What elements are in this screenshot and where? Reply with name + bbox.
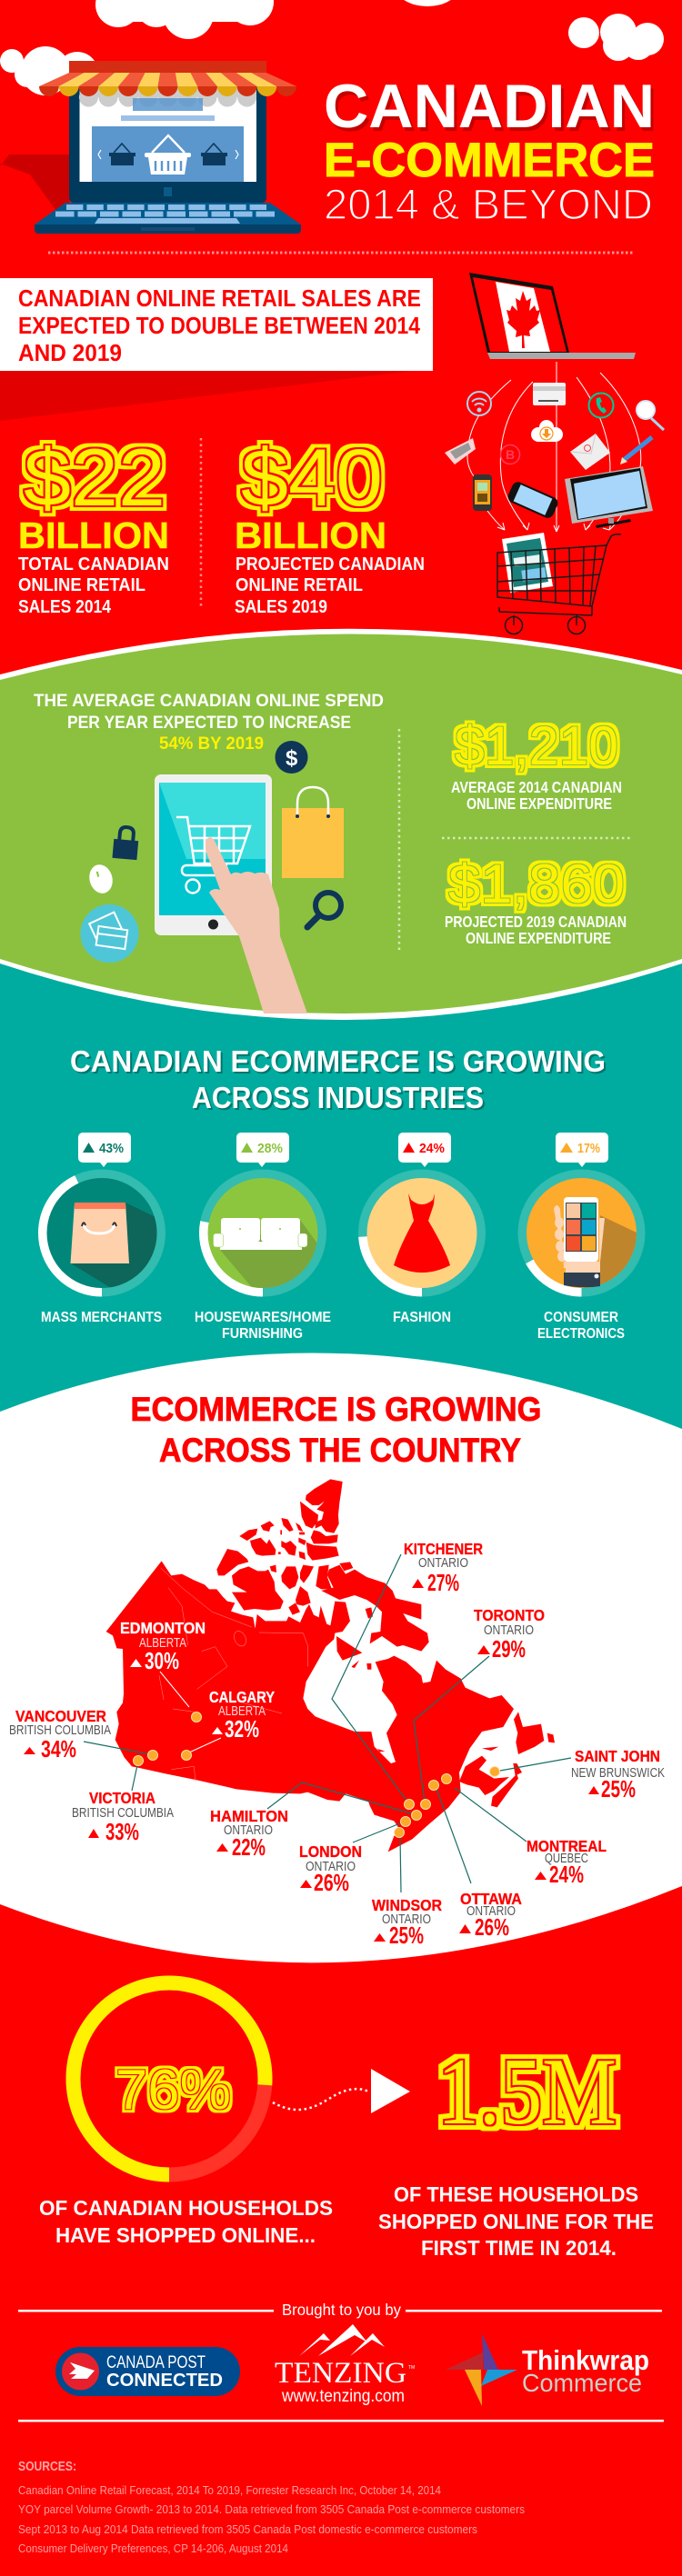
stat: 1.5M: 1.5M [437, 2038, 617, 2144]
label: Vancouver: VANCOUVER [15, 1707, 106, 1725]
stat: $22 billion: SALES 2014 [18, 597, 112, 617]
stat: $1,860: $1,860 [448, 854, 625, 914]
label: Ottawa [459, 1890, 522, 1941]
label: Windsor: 25% [389, 1922, 424, 1949]
icon: pencil [620, 437, 652, 464]
panel: fashion [363, 1133, 481, 1325]
panel: mass merchants: 43% [99, 1141, 124, 1156]
arrow: dotted connector [273, 2069, 410, 2113]
stat: $22 billion: BILLION [18, 514, 169, 556]
label: Ottawa: ONTARIO [466, 1904, 516, 1919]
icon: wifi [467, 392, 491, 415]
panel: housewares [195, 1133, 331, 1342]
logo: Canada Post Connected: CONNECTED [106, 2371, 223, 2391]
panel: housewares: HOUSEWARES/HOME [195, 1310, 331, 1325]
label: Calgary: CALGARY [209, 1688, 275, 1706]
icon: search magnifier [307, 893, 341, 927]
label: Windsor: WINDSOR [372, 1896, 442, 1914]
title: E-COMMERCE [324, 134, 655, 187]
chart: 76% donut [73, 1983, 266, 2174]
heading: across the country: ACROSS THE COUNTRY [159, 1432, 521, 1469]
headline box: AND 2019 [18, 341, 122, 366]
headline box: CANADIAN ONLINE RETAIL SALES ARE [18, 286, 421, 312]
label: Kitchener: 27% [427, 1569, 459, 1596]
map of Canada [106, 1479, 555, 1852]
label: Victoria [72, 1789, 174, 1845]
label: Hamilton: HAMILTON [210, 1807, 288, 1825]
stat: $22 billion: ONLINE RETAIL [18, 575, 145, 595]
green section: PER YEAR EXPECTED TO INCREASE [67, 714, 351, 733]
stat: $40 billion: SALES 2019 [235, 597, 327, 617]
stat: $1,860: PROJECTED 2019 CANADIAN [445, 913, 627, 931]
sources: Sept 2013 to Aug 2014 Data retrieved from 3505 Canada Post domestic e-commerce customers [18, 2523, 477, 2536]
label: Edmonton: EDMONTON [120, 1619, 206, 1637]
label: Victoria: 33% [105, 1818, 139, 1845]
icon: handheld console [506, 480, 560, 520]
panel: mass merchants [41, 1133, 162, 1325]
label: Ottawa: OTTAWA [460, 1890, 522, 1908]
stat: $22 billion [18, 432, 169, 617]
heading: across the country [131, 1391, 542, 1469]
logo: Canada Post Connected: CANADA POST [106, 2353, 206, 2372]
label: Kitchener [404, 1540, 483, 1596]
label: London: ONTARIO [306, 1860, 356, 1874]
label: Toronto: 29% [492, 1635, 526, 1662]
label: Montreal: 24% [549, 1861, 584, 1888]
title: CANADIAN [324, 72, 655, 141]
icon: shopping bag [282, 787, 344, 878]
heading: across the country: ECOMMERCE IS GROWING [131, 1391, 542, 1428]
logo: Tenzing [275, 2324, 415, 2406]
icon: magnifier [637, 401, 664, 430]
stat: $1,860 [445, 854, 627, 947]
icon: storefront laptop [35, 82, 301, 234]
laptop shadow [0, 155, 69, 211]
text: first time shoppers [378, 2182, 654, 2260]
icon: smartphone [473, 474, 492, 511]
label: Saint John: 25% [601, 1775, 636, 1802]
icon: monitor [565, 466, 653, 528]
label: London: 26% [314, 1869, 349, 1896]
label: Windsor: ONTARIO [382, 1912, 431, 1927]
logo: Tenzing: www.tenzing.com [281, 2387, 405, 2406]
label: Saint John [571, 1747, 665, 1802]
stat: $40 billion: ONLINE RETAIL [236, 575, 363, 595]
label: Victoria: VICTORIA [89, 1789, 155, 1807]
teal section background [0, 945, 682, 1454]
panel: housewares: FURNISHING [222, 1326, 303, 1342]
panel: consumer electronics [522, 1133, 640, 1342]
text: households: HAVE SHOPPED ONLINE... [55, 2223, 316, 2247]
icon: shop awning [39, 61, 296, 96]
label: Kitchener: KITCHENER [404, 1540, 483, 1558]
label: Edmonton [120, 1619, 206, 1674]
panel: housewares: 28% [257, 1141, 283, 1156]
label: Edmonton: 30% [145, 1647, 179, 1674]
label: Vancouver: 34% [41, 1735, 76, 1762]
panel: fashion: 24% [419, 1141, 445, 1156]
delivery arcs [467, 362, 641, 532]
label: Calgary [209, 1688, 275, 1742]
label: Edmonton: ALBERTA [139, 1636, 186, 1651]
stat: $1,860: ONLINE EXPENDITURE [466, 929, 611, 947]
stat: $40 billion: $40 [241, 432, 383, 523]
icon: dollar coin: $ [286, 746, 298, 771]
icon: tablet with cart and hand [155, 774, 307, 1013]
heading: industries: CANADIAN ECOMMERCE IS GROWING [70, 1044, 606, 1078]
green section [0, 629, 682, 1020]
heading: industries [70, 1044, 606, 1114]
heading: industries: ACROSS INDUSTRIES [192, 1081, 484, 1114]
icon: laptop with Canadian flag [469, 273, 636, 359]
label: Montreal: QUEBEC [545, 1852, 588, 1866]
green section: THE AVERAGE CANADIAN ONLINE SPEND [34, 692, 384, 711]
label: Montreal [527, 1837, 607, 1888]
white box shadow [0, 368, 435, 421]
label: Toronto [474, 1606, 545, 1662]
label: London: LONDON [299, 1842, 362, 1861]
label: Hamilton: ONTARIO [224, 1823, 273, 1838]
icon: credit card [533, 383, 566, 405]
label: Ottawa: 26% [475, 1913, 509, 1941]
stat: $1,210: AVERAGE 2014 CANADIAN [451, 778, 622, 796]
icon: payment cards [80, 904, 138, 963]
logo: Thinkwrap Commerce: Commerce [522, 2369, 642, 2397]
label: Montreal: MONTREAL [527, 1837, 607, 1855]
icon: price tag [445, 438, 476, 464]
panel: consumer electronics: ELECTRONICS [537, 1326, 625, 1342]
label: Hamilton [210, 1807, 288, 1861]
sources: YOY parcel Volume Growth- 2013 to 2014. Data retrieved from 3505 Canada Post e-commerce customers [18, 2503, 525, 2516]
icon: envelope [570, 434, 610, 470]
stat: $1,210: $1,210 [455, 715, 618, 776]
label: Vancouver: BRITISH COLUMBIA [9, 1723, 111, 1738]
title: 2014 & BEYOND [324, 180, 653, 228]
label: Toronto: ONTARIO [484, 1623, 534, 1638]
icon: bitcoin [500, 445, 520, 464]
logo: Thinkwrap Commerce [446, 2333, 649, 2406]
headline box [0, 278, 433, 371]
text: households: OF CANADIAN HOUSEHOLDS [39, 2196, 333, 2220]
text: first time shoppers: SHOPPED ONLINE FOR THE [378, 2210, 654, 2233]
map leader lines [84, 1554, 571, 1892]
label: Hamilton: 22% [232, 1833, 266, 1861]
text: households [39, 2196, 333, 2247]
panel: fashion: FASHION [393, 1310, 451, 1325]
label: Victoria: BRITISH COLUMBIA [72, 1806, 174, 1821]
text: first time shoppers: FIRST TIME IN 2014. [421, 2236, 617, 2260]
logo: Tenzing: TENZING [275, 2357, 406, 2390]
stat: $22 billion: TOTAL CANADIAN [18, 554, 169, 574]
label: Calgary: 32% [225, 1715, 259, 1742]
label: Toronto: TORONTO [474, 1606, 545, 1624]
stat: $1,210 [451, 715, 622, 813]
logo: Canada Post Connected [55, 2347, 240, 2396]
label: London [299, 1842, 362, 1896]
icon: mouse [86, 862, 115, 896]
stat: $40 billion: BILLION [235, 514, 386, 556]
icon: bitcoin: B [506, 447, 515, 462]
headline box: EXPECTED TO DOUBLE BETWEEN 2014 [18, 314, 421, 339]
panel: mass merchants: MASS MERCHANTS [41, 1310, 162, 1325]
brought to you by: Brought to you by [282, 2301, 401, 2319]
map city markers [133, 1712, 500, 1838]
label: Vancouver [9, 1707, 111, 1762]
sources: Consumer Delivery Preferences, CP 14-206, August 2014 [18, 2542, 288, 2555]
stat: $22 billion: $22 [24, 432, 165, 523]
white map section [0, 1353, 682, 1962]
icon: cloud download [531, 420, 563, 442]
stat: $1,210: ONLINE EXPENDITURE [466, 794, 612, 813]
icon: dollar coin [275, 741, 307, 774]
sources: Canadian Online Retail Forecast, 2014 To 2019, Forrester Research Inc, October 14, 2014 [18, 2484, 441, 2497]
green section: 54% BY 2019 [159, 734, 264, 754]
logo: Thinkwrap Commerce: Thinkwrap [522, 2344, 649, 2376]
sources: SOURCES: [18, 2460, 76, 2474]
stat: $40 billion [235, 432, 425, 617]
panel: consumer electronics: 17% [577, 1141, 600, 1156]
sources [18, 2460, 525, 2555]
chart: 76% donut: 76% [115, 2059, 231, 2122]
title [324, 72, 655, 228]
label: Kitchener: ONTARIO [418, 1556, 468, 1571]
icon: phone call [589, 393, 613, 418]
label: Saint John: SAINT JOHN [575, 1747, 660, 1765]
label: Calgary: ALBERTA [218, 1704, 266, 1719]
icon: padlock [112, 826, 139, 860]
stat: $40 billion: PROJECTED CANADIAN [236, 554, 425, 574]
logo: Tenzing: TM [408, 2365, 415, 2371]
label: Windsor [372, 1896, 442, 1949]
text: first time shoppers: OF THESE HOUSEHOLDS [394, 2182, 638, 2206]
clouds [0, 0, 664, 95]
icon: shopping cart [497, 533, 621, 634]
panel: consumer electronics: CONSUMER [544, 1310, 618, 1325]
